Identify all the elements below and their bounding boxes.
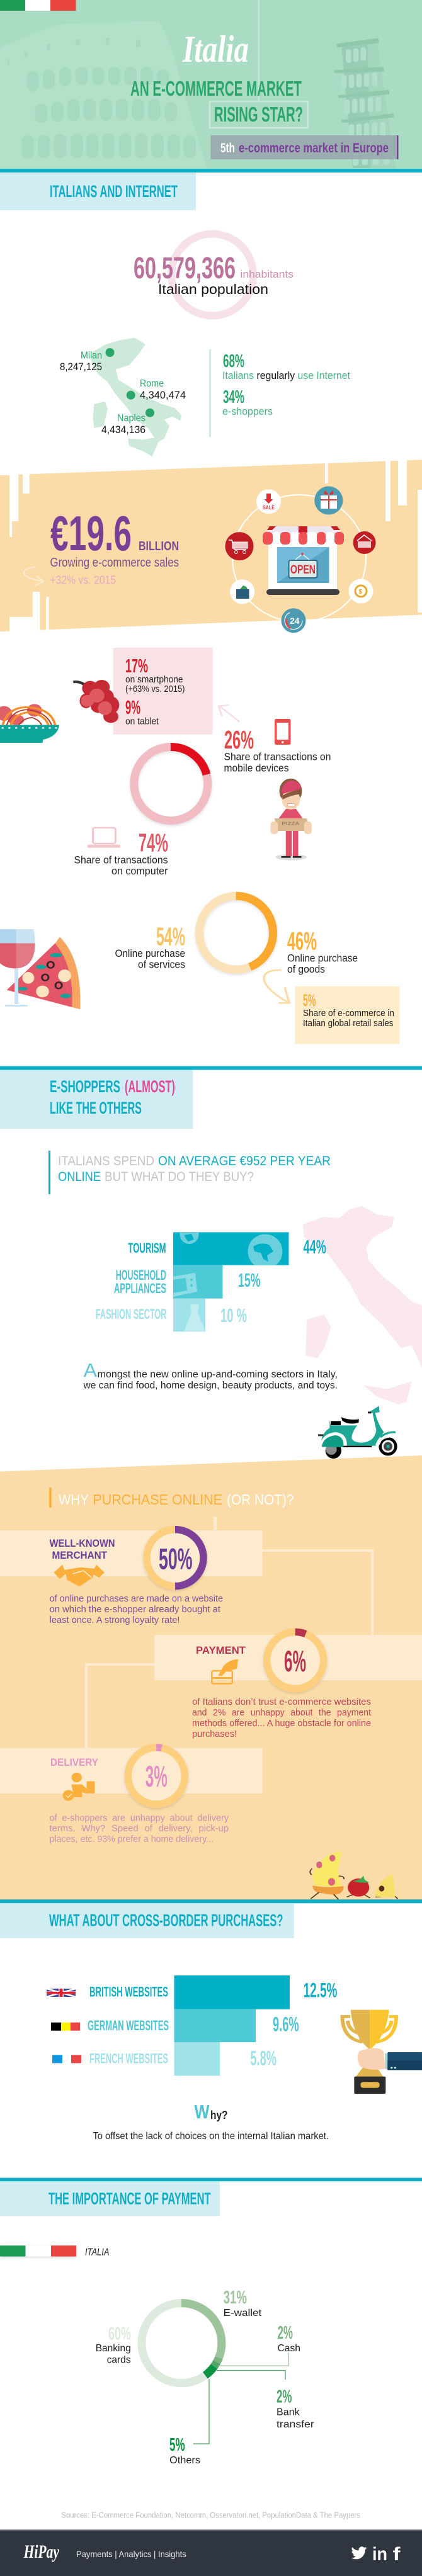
flag: Germany label colors	[51, 2023, 80, 2031]
block: well-known merchant: MERCHANT	[52, 1549, 108, 1561]
icon: facebook: f	[393, 2544, 401, 2565]
icon: linkedin: in	[372, 2544, 387, 2565]
bar: tourism: 44%	[304, 1236, 326, 1258]
map: Italy with main cities: Naples	[117, 413, 145, 424]
hero panel	[0, 0, 422, 169]
stat: Italian population: 60,579,366	[134, 252, 236, 285]
block: well-known merchant: on which the e-shopper already bought at	[50, 1604, 221, 1615]
flag: United Kingdom	[47, 1989, 76, 1997]
icon: basket	[353, 531, 376, 554]
stat: 19.6 billion: Growing e-commerce sales	[50, 556, 179, 570]
stat: 74 percent computer	[74, 828, 168, 877]
icon: open shop	[263, 526, 344, 595]
text block: why: W	[194, 2101, 210, 2123]
text block: spending question: ON AVERAGE €952 PER YEAR	[158, 1154, 331, 1168]
icon: twitter	[351, 2546, 367, 2559]
arrow: to retail share	[264, 970, 289, 1003]
title: Italia: Italia	[182, 28, 249, 70]
bar: household appliances: HOUSEHOLD	[116, 1267, 166, 1283]
stat: 26 percent mobile: 26%	[224, 725, 254, 754]
bar: german websites: 9.6%	[273, 2013, 299, 2036]
stat: 26 percent mobile: Share of transactions on	[224, 750, 331, 763]
icon: laptop	[88, 828, 120, 848]
panel: mobile share: on tablet	[125, 716, 159, 726]
block: delivery: places, etc. 93% prefer a home delivery...	[50, 1834, 214, 1844]
map: Italy with main cities: 8,247,125	[60, 361, 102, 373]
flag: italy	[0, 0, 76, 11]
illustration: colosseum	[0, 21, 207, 168]
stat: Italian population: Italian population	[158, 281, 268, 297]
block: well-known merchant	[0, 1530, 263, 1625]
map: Italy with main cities: 4,340,474	[140, 389, 186, 401]
stat: cash: 2%	[277, 2323, 293, 2343]
callout: retail share: 5%	[303, 991, 316, 1010]
leader lines	[193, 2353, 288, 2444]
stat: bank transfer: 2%	[277, 2387, 292, 2407]
title: an e-commerce market rising star	[130, 77, 303, 126]
heading: e-shoppers almost like the others: LIKE THE OTHERS	[50, 1099, 142, 1117]
stat: 19.6 billion: €19.6	[50, 506, 132, 561]
bar: household appliances	[114, 1265, 261, 1299]
icon: coin: $	[359, 589, 363, 596]
text block: spending question: BUT WHAT DO THEY BUY?	[105, 1170, 254, 1184]
callout: 5th e-commerce market in Europe: 5th	[220, 141, 235, 155]
stat: goods: of goods	[287, 963, 325, 975]
stat: e-wallet: E-wallet	[224, 2308, 262, 2319]
panel: mobile share: (+63% vs. 2015)	[125, 684, 185, 694]
panel: e-commerce sales	[0, 460, 422, 633]
illustration: leaning tower	[334, 38, 396, 168]
map: Italy with main cities: Rome	[140, 378, 164, 389]
block: payment: methods offered... A huge obstacle for online	[192, 1718, 371, 1729]
block: payment	[154, 1632, 422, 1739]
text block: why: To offset the lack of choices on the internal Italian market.	[93, 2131, 329, 2142]
text block: spending question: ONLINE	[58, 1170, 101, 1184]
text block: upcoming sectors	[83, 1359, 338, 1391]
stat: others	[169, 2435, 200, 2466]
stat: services: Online purchase	[115, 947, 185, 959]
stat: banking cards	[96, 2324, 131, 2366]
bar chart: online purchase sectors	[96, 1225, 326, 1331]
block: payment: and 2% are unhappy about the payment	[192, 1707, 372, 1718]
illustration: scooter	[318, 1406, 397, 1459]
heading: cross-border purchases	[0, 1903, 294, 1938]
bar: british websites: BRITISH WEBSITES	[89, 1984, 168, 2000]
title: an e-commerce market rising star: RISING STAR?	[214, 103, 303, 126]
icon: wallet	[230, 579, 254, 604]
stat: e-wallet	[224, 2288, 262, 2319]
block: payment: PAYMENT	[196, 1644, 246, 1656]
heading: Italians and internet: ITALIANS AND INTERNET	[50, 182, 178, 201]
stat: 19.6 billion: +32% vs. 2015	[50, 574, 116, 587]
donut chart: 3 percent	[128, 1748, 185, 1804]
block: delivery	[0, 1748, 263, 1844]
icon: 24 hour phone: 24	[290, 616, 300, 626]
stat: Italian population	[134, 234, 294, 316]
block: well-known merchant: of online purchases are made on a website	[50, 1593, 223, 1604]
stat: goods: 46%	[287, 927, 317, 956]
stat: services	[115, 922, 185, 971]
bar: household appliances: APPLIANCES	[114, 1280, 166, 1296]
bar: british websites	[89, 1975, 337, 2009]
illustration: trophy	[343, 2010, 422, 2094]
bar: fashion sector: 10 %	[220, 1304, 247, 1326]
block: payment: purchases!	[192, 1729, 237, 1739]
illustration: pizza delivery man	[270, 779, 312, 861]
bar: german websites: GERMAN WEBSITES	[88, 2018, 169, 2033]
illustration: pizza delivery man: PIZZA	[282, 821, 300, 826]
stat: 19.6 billion: BILLION	[139, 539, 179, 553]
panel: mobile share: 17%	[125, 655, 148, 677]
panel: mobile share	[113, 648, 213, 735]
heading: cross-border purchases: WHAT ABOUT CROSS-BORDER PURCHASES?	[49, 1911, 283, 1929]
block: delivery: 3%	[145, 1760, 168, 1793]
text block: why purchase online heading	[49, 1488, 294, 1508]
icon: cart	[225, 532, 253, 560]
stat: Italian population: inhabitants	[241, 268, 294, 280]
icon: smartphone	[275, 719, 291, 745]
panel: why purchase online	[0, 1406, 422, 1900]
text block: spending question: ITALIANS SPEND	[58, 1154, 154, 1168]
text block: why purchase online heading: WHY	[59, 1491, 89, 1508]
stats: internet users: e-shoppers	[222, 406, 273, 417]
icon: handshake	[54, 1565, 105, 1586]
stats: internet users: 68%	[223, 351, 244, 371]
stat: cash	[277, 2323, 300, 2354]
illustration: running pizza tomato and cheese	[310, 1852, 398, 1899]
stat: 19.6 billion	[50, 506, 179, 587]
text block: spending question	[48, 1151, 331, 1194]
block: delivery: of e-shoppers are unhappy about delivery	[50, 1812, 229, 1823]
bar: german websites	[88, 2009, 299, 2042]
text block: why	[93, 2101, 329, 2142]
panel: mobile share: 9%	[125, 696, 140, 718]
stat: services: of services	[138, 958, 185, 971]
block: payment: 6%	[284, 1644, 306, 1678]
stat: bank transfer	[277, 2387, 314, 2430]
callout: 5th e-commerce market in Europe	[210, 135, 398, 159]
flag and label: Italia	[0, 2246, 110, 2258]
map: Italy with main cities	[60, 338, 186, 456]
bar chart: cross-border websites	[88, 1975, 337, 2076]
block: well-known merchant: WELL-KNOWN	[50, 1537, 115, 1549]
title: an e-commerce market rising star: AN E-COMMERCE MARKET	[130, 77, 302, 100]
stat: others: Others	[169, 2455, 200, 2466]
stat: banking cards: Banking	[96, 2343, 131, 2354]
bar: french websites: 5.8%	[250, 2047, 277, 2070]
illustration: pasta bowl	[0, 704, 59, 743]
donut chart: 6 percent	[267, 1632, 324, 1688]
bar: french websites	[89, 2042, 277, 2076]
icon: card payment	[212, 1659, 238, 1684]
icon: delivery person	[63, 1773, 94, 1801]
stat: banking cards: 60%	[108, 2324, 131, 2344]
heading: e-shoppers almost like the others: (ALMOST)	[125, 1077, 175, 1096]
stat: 26 percent mobile	[224, 725, 331, 774]
block: delivery: terms. Why? Speed of delivery, pick-up	[50, 1823, 229, 1834]
donut chart: goods versus services	[199, 896, 273, 969]
stat: others: 5%	[169, 2435, 185, 2455]
stat: 74 percent computer: on computer	[111, 865, 168, 877]
bar: household appliances: 15%	[238, 1269, 261, 1291]
heading: the importance of payment: THE IMPORTANCE OF PAYMENT	[48, 2189, 211, 2208]
stat: cash: Cash	[277, 2343, 300, 2354]
tagline: Payments | Analytics | Insights	[76, 2549, 186, 2559]
illustration: pizza slice and wine	[0, 929, 81, 1009]
arrow: to mobile breakdown	[219, 705, 239, 722]
block: well-known merchant: least once. A strong loyalty rate!	[50, 1615, 180, 1625]
illustration: online shop with icons	[225, 486, 376, 633]
bar: tourism: TOURISM	[128, 1240, 166, 1256]
icon: open shop: OPEN	[290, 563, 316, 577]
text block: why purchase online heading: (OR NOT)?	[227, 1491, 294, 1508]
callout: retail share	[295, 986, 399, 1044]
block: well-known merchant: 50%	[159, 1542, 193, 1576]
stat: bank transfer: Bank	[277, 2407, 300, 2417]
flag and label: Italia: ITALIA	[85, 2247, 110, 2258]
heading: the importance of payment	[0, 2181, 220, 2216]
background map: Italy	[303, 1206, 422, 1404]
illustration: grapes	[73, 680, 119, 723]
stat: 74 percent computer: 74%	[139, 828, 168, 857]
panel: mobile share: on smartphone	[125, 674, 183, 685]
text block: upcoming sectors: we can find food, home design, beauty products, and toys.	[83, 1380, 338, 1391]
donut chart: payment methods	[142, 2303, 222, 2383]
map: Italy with main cities: Milan	[81, 350, 102, 361]
stats: internet users: Italians regularly use Internet	[222, 370, 350, 381]
text block: upcoming sectors: mongst the new online up-and-coming sectors in Italy,	[98, 1369, 338, 1380]
logo: HiPay: HiPay	[23, 2541, 59, 2562]
block: payment: of Italians don’t trust e-commerce websites	[192, 1697, 371, 1707]
heading: Italians and internet	[0, 172, 196, 210]
heading: e-shoppers almost like the others: E-SHOPPERS	[50, 1077, 120, 1096]
callout: retail share: Share of e-commerce in	[303, 1008, 394, 1019]
bar: french websites: FRENCH WEBSITES	[89, 2050, 168, 2066]
arrow: growth	[24, 567, 43, 586]
stat: banking cards: cards	[107, 2355, 131, 2366]
icon: gift	[314, 486, 343, 515]
text block: why: hy?	[210, 2109, 228, 2121]
flag: France	[52, 2055, 81, 2063]
bar: fashion sector: FASHION SECTOR	[96, 1306, 167, 1322]
stat: bank transfer: transfer	[277, 2419, 314, 2430]
icon: sale: SALE	[263, 504, 275, 511]
bar: fashion sector	[96, 1299, 247, 1331]
callout: retail share: Italian global retail sales	[303, 1018, 393, 1029]
stat: goods	[287, 927, 358, 975]
stat: 74 percent computer: Share of transactions	[74, 854, 168, 866]
bar: tourism	[128, 1232, 326, 1265]
bar: british websites: 12.5%	[304, 1979, 337, 2002]
text block: upcoming sectors: A	[83, 1359, 97, 1381]
icon: sale	[256, 489, 281, 514]
donut chart: transactions by device	[134, 747, 208, 821]
icon: coin	[349, 579, 373, 603]
stat: services: 54%	[156, 922, 185, 951]
heading: e-shoppers almost like the others	[0, 1070, 193, 1129]
stat: goods: Online purchase	[287, 952, 358, 964]
sources: Sources: E-Commerce Foundation, Netcomm, Osservatori.net, PopulationData & The Paypers	[61, 2511, 360, 2519]
block: delivery: DELIVERY	[50, 1756, 99, 1768]
text block: why purchase online heading: PURCHASE ONLINE	[93, 1491, 222, 1508]
icon: 24 hour phone	[281, 608, 306, 633]
stats: internet users: 34%	[223, 387, 244, 407]
stat: 26 percent mobile: mobile devices	[224, 762, 288, 774]
stats: internet users	[222, 351, 350, 417]
map: Italy with main cities: 4,434,136	[101, 424, 145, 436]
donut chart: 50 percent	[147, 1530, 203, 1586]
stat: e-wallet: 31%	[224, 2288, 247, 2308]
footer	[0, 2529, 422, 2576]
